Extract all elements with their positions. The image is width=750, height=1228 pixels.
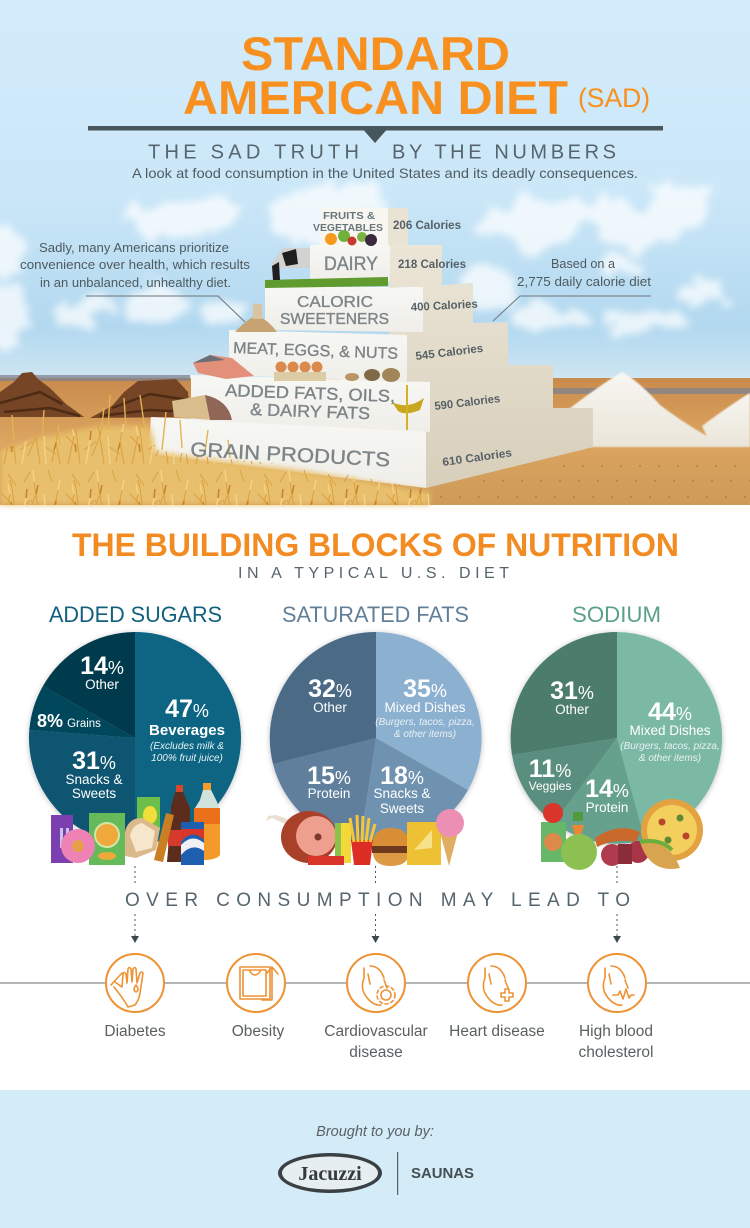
condition labels: disease (349, 1044, 403, 1061)
condition labels: Heart disease (449, 1023, 545, 1040)
pie labels: saturated fats: Sweets (380, 801, 424, 816)
cow (271, 248, 310, 280)
condition labels (104, 1023, 653, 1061)
pie labels: saturated fats: 32% (308, 675, 352, 703)
desert ground (0, 378, 750, 505)
pie heading: saturated fats: SATURATED FATS (282, 602, 469, 627)
logo: saunas: SAUNAS (411, 1165, 474, 1182)
pie labels: added sugars: Other (85, 677, 119, 692)
title: AMERICAN DIET (183, 71, 568, 124)
pie labels: sodium: Protein (586, 800, 628, 815)
subtitle: THE SAD TRUTH (148, 142, 359, 164)
pie heading: added sugars: ADDED SUGARS (49, 602, 222, 627)
hero: desert scene with sugar pyramid (0, 0, 750, 505)
pie labels: sodium: Veggies (529, 779, 571, 793)
callout: left (20, 240, 251, 322)
pie labels: saturated fats: (Burgers, tacos, pizza, (375, 717, 475, 728)
arrows from pies to conditions (131, 866, 621, 943)
sponsor line: Brought to you by: (316, 1124, 434, 1140)
pie labels: sodium (529, 677, 720, 815)
callout: right: 2,775 daily calorie diet (517, 274, 651, 289)
sugar piles (565, 372, 750, 447)
pyramid label: caloric sweeteners (280, 294, 389, 328)
rock hills (0, 372, 190, 418)
pie labels: saturated fats: Protein (308, 786, 350, 801)
subtitle: BY THE NUMBERS (392, 142, 616, 164)
pie labels: sodium: Other (555, 702, 589, 717)
food illustration: fatty foods (266, 809, 464, 866)
tier: added fats (191, 365, 553, 432)
condition labels: Diabetes (104, 1023, 166, 1040)
ice cream cone (172, 395, 232, 420)
pie labels: sodium: 44% (648, 698, 692, 726)
tier: meat (229, 322, 508, 382)
condition labels: Obesity (232, 1023, 285, 1040)
oil drop (392, 385, 424, 430)
pie labels: added sugars: Grains (67, 718, 101, 730)
pie labels: sodium: Mixed Dishes (629, 723, 711, 738)
pie chart: saturated fats (270, 632, 482, 844)
calories 400: 400 Calories (411, 299, 478, 314)
pyramid label: meat eggs nuts: MEAT, EGGS, & NUTS (233, 340, 398, 363)
tier: fruits (320, 208, 408, 245)
title rule with pointer (88, 126, 663, 143)
pyramid label: fruits and vegetables (313, 210, 383, 234)
pyramid label: added fats (225, 381, 395, 423)
pyramid label: caloric sweeteners: CALORIC (297, 294, 373, 311)
pyramid label: fruits and vegetables: FRUITS & (323, 210, 375, 222)
callout: right (493, 256, 651, 321)
pie chart: sodium (511, 632, 722, 844)
icon: cholesterol heart with pulse (588, 954, 646, 1012)
distant horizon (0, 375, 750, 394)
title (183, 27, 568, 124)
food illustration: salty foods (541, 799, 703, 870)
callout: left: convenience over health, which results (20, 257, 251, 272)
section heading: THE BUILDING BLOCKS OF NUTRITION (72, 527, 679, 563)
pie labels: added sugars: Snacks & (65, 772, 123, 787)
calories 218: 218 Calories (398, 259, 466, 271)
pie labels: saturated fats: 15% (307, 762, 351, 790)
pie labels: added sugars: 14% (80, 652, 124, 680)
pie labels: sodium: 31% (550, 677, 594, 705)
pie labels: saturated fats: 18% (380, 762, 424, 790)
pie labels: added sugars: 47% (165, 695, 209, 723)
tier: dairy (310, 245, 442, 288)
pyramid label: caloric sweeteners: SWEETENERS (280, 311, 389, 328)
pyramid label: dairy: DAIRY (324, 254, 378, 275)
icon: obesity scale (227, 954, 285, 1012)
nuts (345, 368, 400, 382)
condition labels: Cardiovascular (324, 1023, 428, 1040)
condition labels: cholesterol (579, 1044, 653, 1061)
clouds (0, 181, 727, 349)
calories 206: 206 Calories (393, 220, 461, 232)
pie labels: saturated fats: Other (313, 700, 347, 715)
pie heading: sodium: SODIUM (572, 602, 661, 627)
pie labels: added sugars: 31% (72, 747, 116, 775)
callout: right: Based on a (551, 256, 616, 271)
pie labels: sodium: 11% (529, 755, 571, 783)
title suffix: (SAD) (578, 83, 650, 113)
calories 610: 610 Calories (442, 447, 513, 469)
pie labels: sodium: & other items) (639, 753, 701, 764)
eggs in carton (274, 362, 326, 381)
wheat stalks (12, 395, 230, 458)
pie labels: saturated fats: 35% (403, 675, 447, 703)
icon: cardiovascular heart with gear (347, 954, 405, 1012)
subtitle (148, 142, 616, 164)
mixed fruit (325, 230, 377, 246)
pie labels: added sugars: (Excludes milk & (150, 741, 224, 752)
sugar cube pyramid (148, 208, 593, 488)
icon: diabetes hand (106, 954, 164, 1012)
calories 545: 545 Calories (415, 343, 484, 363)
calories 590: 590 Calories (434, 393, 501, 413)
pyramid label: added fats: ADDED FATS, OILS, (225, 381, 395, 406)
icon: heart disease with cross (468, 954, 526, 1012)
section subheading: IN A TYPICAL U.S. DIET (238, 565, 509, 582)
logo: Jacuzzi: Jacuzzi (298, 1163, 362, 1185)
ground speckle (440, 466, 750, 497)
divider (397, 1152, 398, 1195)
title: STANDARD (241, 27, 510, 80)
pie labels: added sugars (37, 652, 225, 801)
pie labels: saturated fats (307, 675, 475, 816)
pie labels: added sugars: 8% (37, 711, 63, 731)
sky background (0, 0, 750, 385)
pie labels: saturated fats: & other items) (394, 729, 456, 740)
pie labels: added sugars: 100% fruit juice) (151, 753, 223, 764)
pyramid solid side fill (388, 208, 593, 488)
pyramid label: fruits and vegetables: VEGETABLES (313, 222, 383, 234)
intro line: A look at food consumption in the United States and its deadly consequences. (132, 165, 638, 181)
pie labels: added sugars: Beverages (149, 722, 225, 739)
grass strip (265, 277, 388, 288)
pyramid label: added fats: & DAIRY FATS (250, 400, 370, 423)
tier: grain products (148, 408, 593, 488)
callout: left: in an unbalanced, unhealthy diet. (40, 275, 231, 290)
timeline line (0, 982, 750, 984)
pie labels: saturated fats: Mixed Dishes (384, 700, 466, 715)
pie chart: added sugars (29, 632, 241, 844)
pie labels: sodium: 14% (585, 775, 629, 803)
logo: Jacuzzi (278, 1153, 382, 1193)
condition labels: High blood (579, 1023, 653, 1040)
pie labels: saturated fats: Snacks & (373, 786, 431, 801)
tier: sweeteners (265, 283, 473, 332)
wheat field (0, 424, 430, 505)
callout: left: Sadly, many Americans prioritize (39, 240, 229, 255)
pie labels: sodium: (Burgers, tacos, pizza, (620, 741, 720, 752)
pyramid label: grain products: GRAIN PRODUCTS (190, 439, 391, 471)
meat (193, 355, 254, 379)
sugar heap with spoon (235, 304, 277, 332)
footer band (0, 1090, 750, 1228)
food illustration: sugary snacks and drinks (51, 783, 220, 865)
connector: over consumption text: OVER CONSUMPTION MAY LEAD TO (125, 890, 630, 911)
pie labels: added sugars: Sweets (72, 786, 116, 801)
